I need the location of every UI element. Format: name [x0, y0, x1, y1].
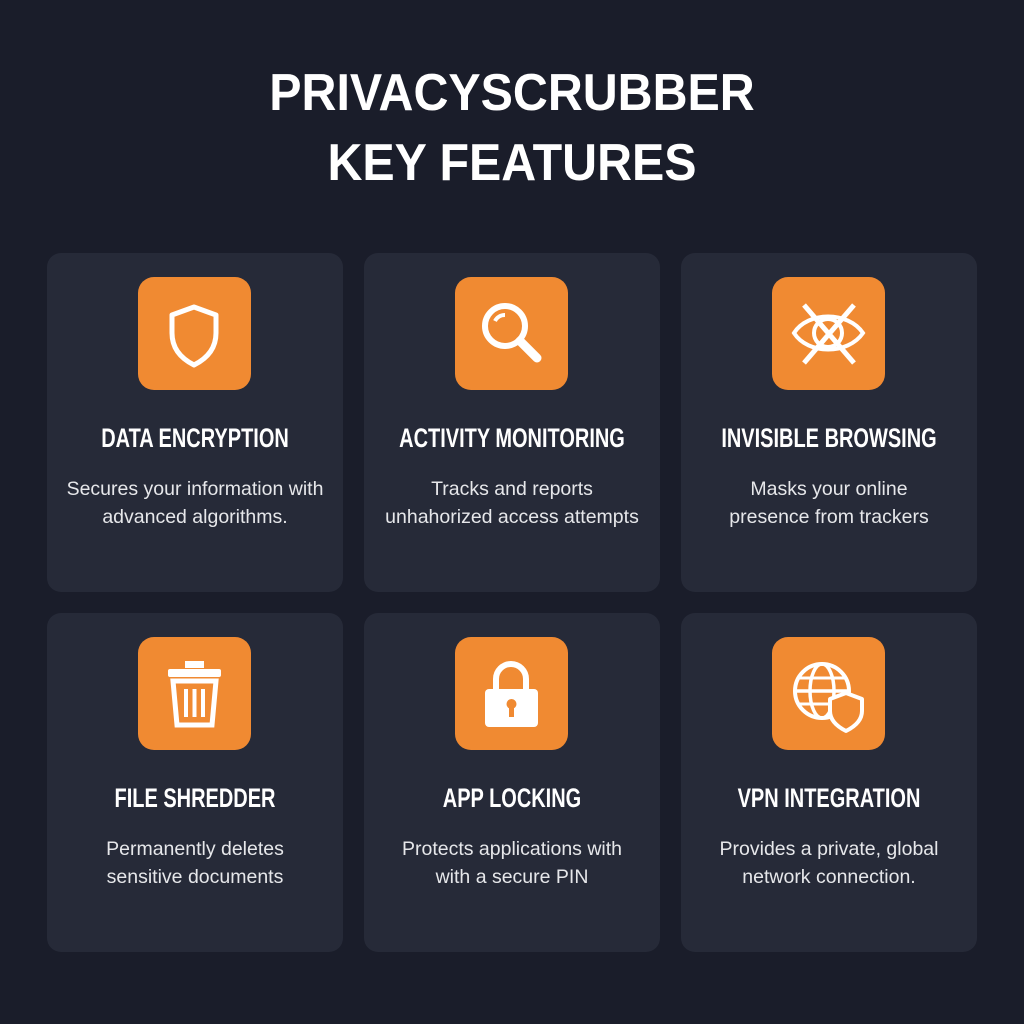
icon: globe with shield: [772, 637, 885, 750]
description: Masks your online: [750, 478, 908, 500]
icon: padlock: [455, 637, 568, 750]
description: advanced algorithms.: [102, 506, 288, 528]
description: Secures your information with: [67, 478, 323, 500]
heading: INVISIBLE BROWSING: [721, 423, 937, 453]
description: [729, 478, 929, 528]
description: [720, 838, 938, 888]
panel: file shredder: [47, 613, 343, 952]
description: [67, 478, 323, 528]
description: [385, 478, 639, 528]
description: Provides a private, global: [720, 838, 938, 860]
panel: activity monitoring: [364, 253, 660, 592]
heading: APP LOCKING: [443, 783, 581, 813]
heading: FILE SHREDDER: [115, 783, 275, 813]
description: [402, 838, 622, 888]
panel: data encryption: [47, 253, 343, 592]
title: KEY FEATURES: [327, 134, 697, 192]
heading: VPN INTEGRATION: [738, 783, 920, 813]
description: presence from trackers: [729, 506, 929, 528]
description: unhahorized access attempts: [385, 506, 639, 528]
title: [269, 64, 755, 192]
title: PRIVACYSCRUBBER: [269, 64, 755, 122]
icon: magnifier: [455, 277, 568, 390]
panel: vpn integration: [681, 613, 977, 952]
icon: crossed eye: [772, 277, 885, 390]
description: Tracks and reports: [431, 478, 593, 500]
icon: trash: [138, 637, 251, 750]
heading: ACTIVITY MONITORING: [399, 423, 625, 453]
heading: DATA ENCRYPTION: [101, 423, 289, 453]
description: [106, 838, 284, 888]
description: Permanently deletes: [106, 838, 284, 860]
panel: invisible browsing: [681, 253, 977, 592]
icon: shield: [138, 277, 251, 390]
description: sensitive documents: [107, 866, 283, 888]
description: with a secure PIN: [436, 866, 588, 888]
panel: app locking: [364, 613, 660, 952]
description: Protects applications with: [402, 838, 622, 860]
description: network connection.: [742, 866, 916, 888]
